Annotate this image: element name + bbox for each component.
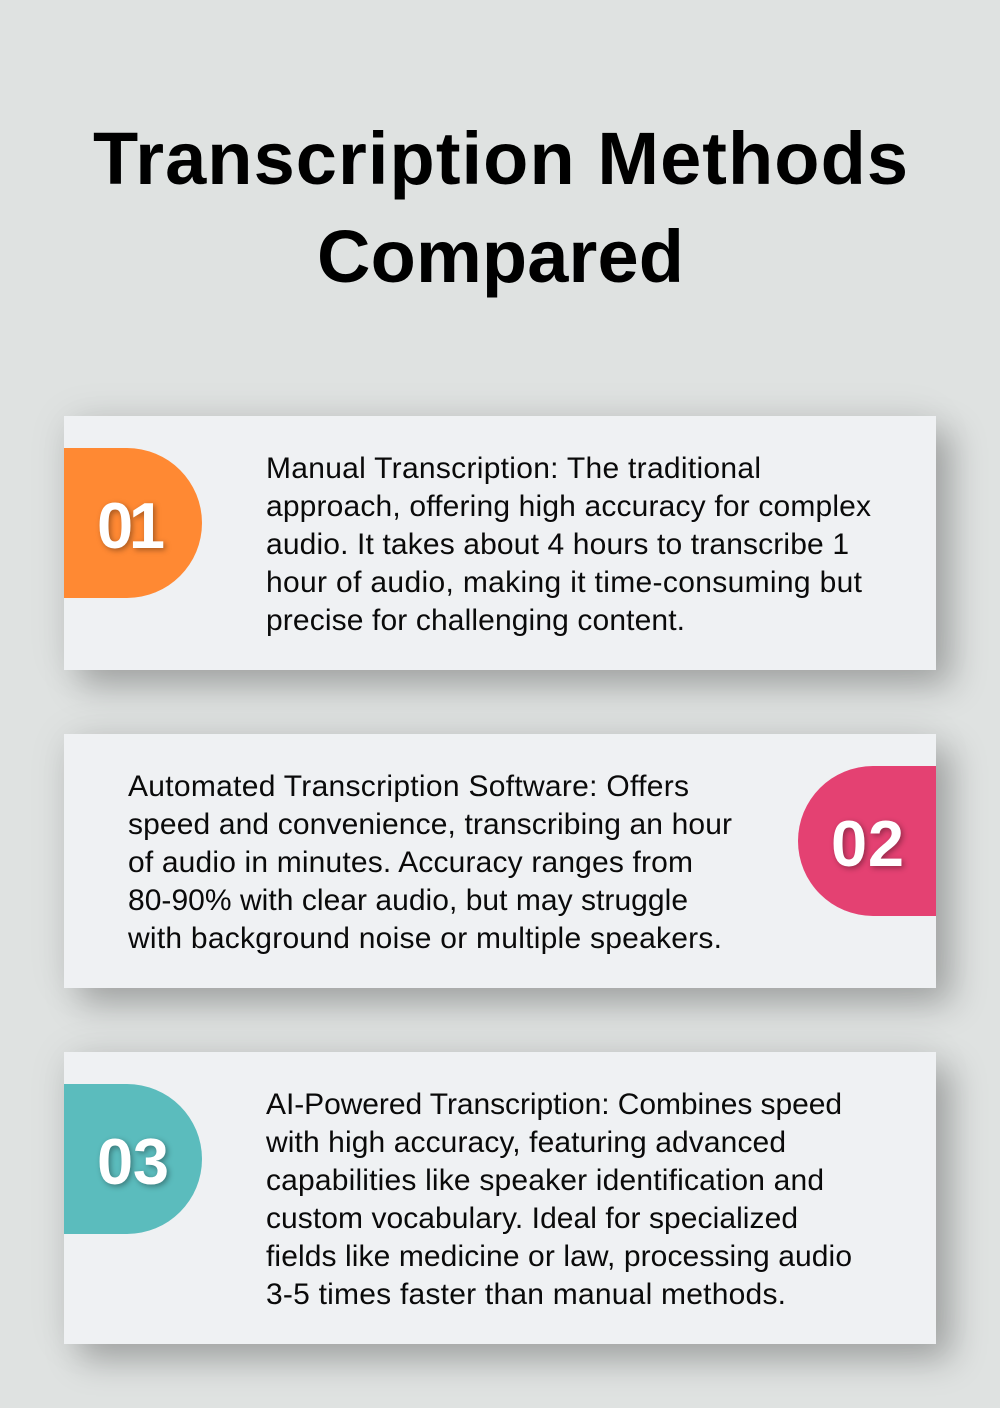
text: AI-powered transcription description: 3-5 times faster than manual methods. xyxy=(266,1278,786,1311)
panel: manual transcription xyxy=(64,416,936,670)
text: automated transcription description xyxy=(127,770,732,955)
panel: automated transcription software xyxy=(64,734,936,988)
text: manual transcription description: hour of audio, making it time-consuming but xyxy=(266,566,863,599)
title: Transcription Methods xyxy=(93,117,908,200)
badge: 02 xyxy=(798,766,936,916)
text: automated transcription description: speed and convenience, transcribing an hour xyxy=(128,808,732,841)
panel: AI-powered transcription xyxy=(64,1052,936,1344)
text: manual transcription description: audio. It takes about 4 hours to transcribe 1 xyxy=(266,528,849,561)
title xyxy=(93,117,908,298)
text: AI-powered transcription description: with high accuracy, featuring advanced xyxy=(265,1126,786,1159)
badge: 03 xyxy=(64,1084,202,1234)
text: automated transcription description: Automated Transcription Software: Offers xyxy=(128,770,689,803)
text: AI-powered transcription description: custom vocabulary. Ideal for specialized xyxy=(266,1202,798,1235)
text: AI-powered transcription description xyxy=(265,1088,852,1311)
text: automated transcription description: 80-90% with clear audio, but may struggle xyxy=(128,884,688,917)
text: manual transcription description: precise for challenging content. xyxy=(266,604,685,637)
badge: 01 xyxy=(64,448,202,598)
text: manual transcription description: approach, offering high accuracy for complex xyxy=(266,490,871,523)
badge: 02: 02 xyxy=(831,807,904,880)
text: automated transcription description: of audio in minutes. Accuracy ranges from xyxy=(128,846,693,879)
badge: 03: 03 xyxy=(97,1125,169,1198)
text: AI-powered transcription description: AI-Powered Transcription: Combines speed xyxy=(266,1088,842,1121)
text: manual transcription description xyxy=(266,452,871,637)
text: AI-powered transcription description: fields like medicine or law, processing audio xyxy=(266,1240,852,1273)
text: AI-powered transcription description: capabilities like speaker identification and xyxy=(266,1164,824,1197)
badge: 01: 01 xyxy=(97,489,165,562)
text: automated transcription description: with background noise or multiple speakers. xyxy=(127,922,722,955)
text: manual transcription description: Manual Transcription: The traditional xyxy=(266,452,761,485)
title: Compared xyxy=(317,215,684,298)
